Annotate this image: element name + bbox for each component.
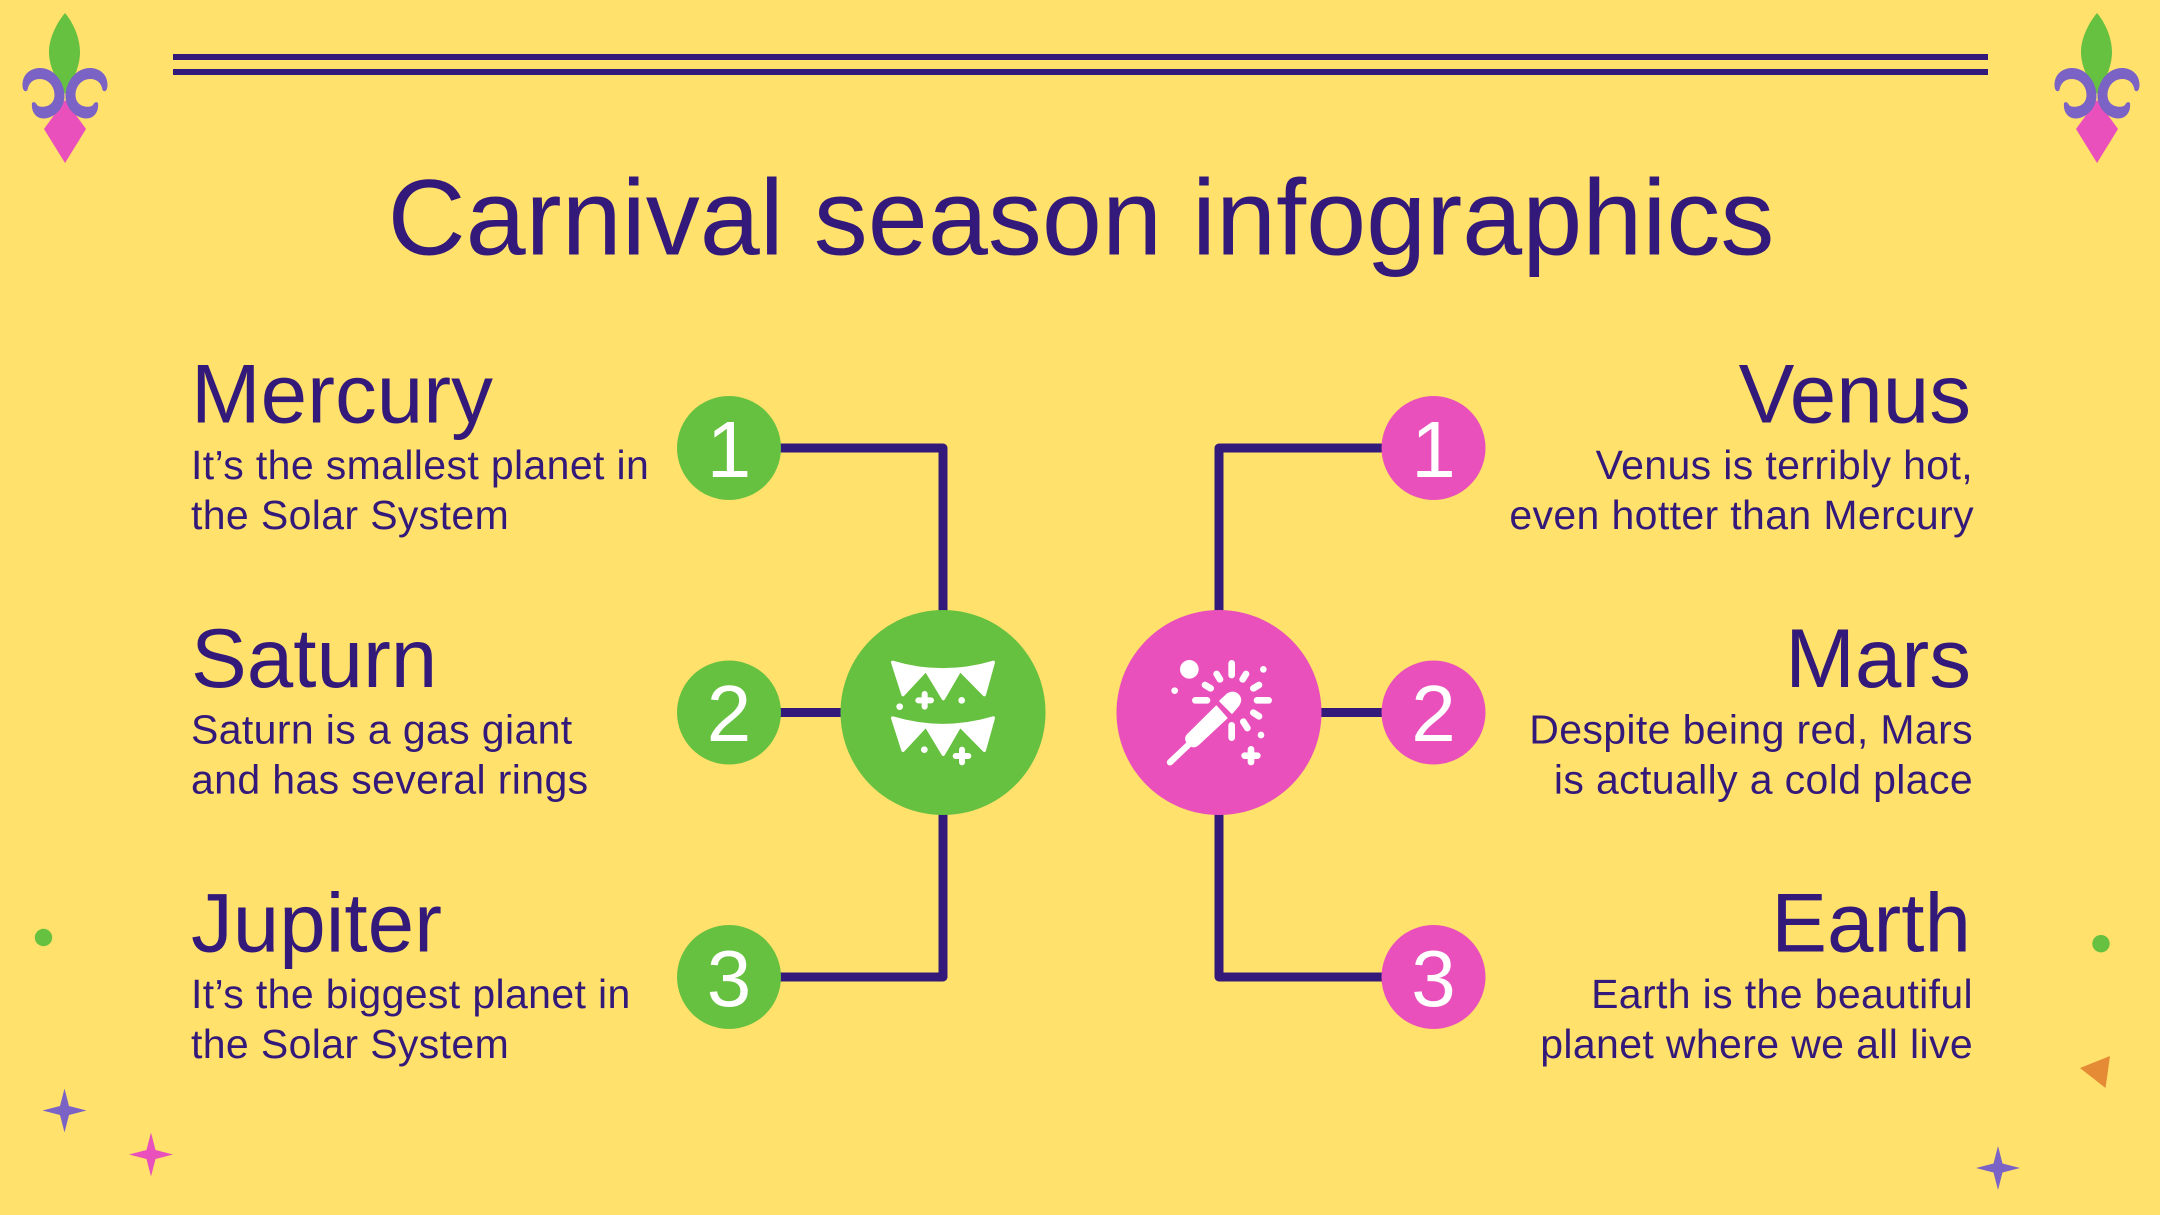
item: Mercury: the Solar System — [191, 492, 509, 538]
item: Earth: Earth — [1771, 876, 1971, 970]
numbered badges: green — [677, 396, 781, 1029]
panel: left list — [191, 346, 649, 1067]
item: Mars — [1529, 611, 1973, 802]
double rule at top — [173, 54, 1988, 75]
item: Jupiter: Jupiter — [191, 876, 442, 970]
decoration: purple star right — [1976, 1146, 2020, 1190]
numbered badges: pink: 1 — [1411, 405, 1456, 494]
icon: fleur-de-lis right — [2054, 13, 2140, 163]
icon: pink circle with sparkler — [1116, 610, 1322, 815]
item: Earth — [1540, 876, 1973, 1067]
numbered badges: green: 2 — [707, 669, 751, 758]
numbered badges: pink: 3 — [1411, 934, 1456, 1023]
decoration: green dot right — [2092, 935, 2110, 952]
item: Saturn: and has several rings — [191, 756, 588, 802]
connectors: left — [729, 448, 943, 977]
item: Saturn: Saturn — [191, 611, 437, 705]
item: Earth: Earth is the beautiful — [1591, 971, 1973, 1017]
title: Carnival season infographics — [388, 157, 1774, 278]
item: Mars: is actually a cold place — [1554, 756, 1973, 802]
numbered badges: green: 1 — [707, 405, 751, 494]
item: Earth: planet where we all live — [1540, 1021, 1973, 1067]
decoration: green dot left — [35, 929, 52, 946]
numbered badges: pink — [1382, 396, 1486, 1029]
connectors: right — [1219, 448, 1433, 977]
item: Venus — [1509, 346, 1974, 538]
decoration: orange triangle — [2080, 1056, 2110, 1088]
icon: fleur-de-lis left — [22, 13, 108, 163]
item: Saturn — [191, 611, 588, 802]
decoration: pink star — [129, 1132, 173, 1176]
panel: right list — [1509, 346, 1974, 1067]
item: Mercury: Mercury — [191, 346, 493, 440]
numbered badges: green: 3 — [707, 934, 751, 1023]
icon: green circle with bunting — [840, 610, 1046, 815]
item: Mars: Mars — [1785, 611, 1971, 705]
item: Venus: Venus is terribly hot, — [1596, 442, 1973, 488]
item: Jupiter: the Solar System — [191, 1021, 509, 1067]
item: Venus: even hotter than Mercury — [1509, 492, 1974, 538]
decoration: purple star left — [42, 1088, 86, 1132]
item: Jupiter: It’s the biggest planet in — [191, 971, 631, 1017]
item: Saturn: Saturn is a gas giant — [191, 706, 573, 752]
item: Venus: Venus — [1739, 346, 1971, 440]
numbered badges: pink: 2 — [1411, 669, 1456, 758]
item: Mars: Despite being red, Mars — [1529, 706, 1973, 752]
item: Mercury — [191, 346, 649, 538]
item: Mercury: It’s the smallest planet in — [191, 442, 649, 488]
item: Jupiter — [191, 876, 631, 1067]
